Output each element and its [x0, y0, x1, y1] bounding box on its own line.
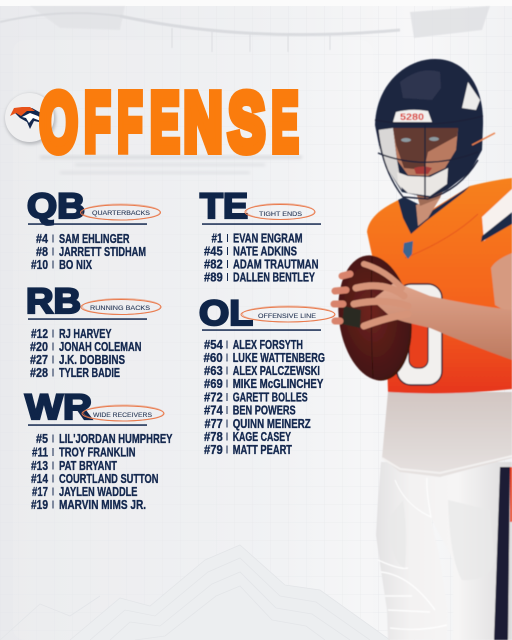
- helmet: [375, 59, 495, 199]
- roster: TE: #82: [204, 256, 223, 272]
- heading: OL: OL: [199, 294, 253, 333]
- roster: WR: MARVIN MIMS JR.: [59, 497, 146, 512]
- roster: RB: J.K. DOBBINS: [59, 352, 125, 367]
- roster: WR: TROY FRANKLIN: [59, 444, 136, 460]
- roster: OL: #74: [204, 403, 223, 418]
- divider: QB: [28, 223, 147, 225]
- roster: RB: #20: [30, 339, 48, 354]
- roster: OL: KAGE CASEY: [233, 429, 291, 444]
- roster: OL: ALEX FORSYTH: [233, 337, 303, 352]
- heading: WR: WR: [25, 388, 92, 427]
- roster: OL: #60: [204, 350, 223, 365]
- divider: RB: [28, 318, 147, 320]
- heading: RB: RB: [26, 282, 81, 321]
- roster: RB: #28: [30, 365, 48, 380]
- divider: TE: [202, 223, 321, 225]
- football: [331, 251, 419, 385]
- roster: TE: NATE ADKINS: [233, 244, 297, 258]
- roster: OL: #79: [204, 442, 223, 457]
- label: wide receivers: WIDE RECEIVERS: [93, 412, 152, 419]
- title: F: [84, 76, 110, 168]
- panel: WR: [25, 388, 173, 512]
- team logo badge: [5, 93, 56, 144]
- roster: TE: #89: [204, 270, 223, 284]
- title: E: [150, 76, 180, 168]
- visor gap: [378, 128, 402, 190]
- label: tight ends: TIGHT ENDS: [259, 211, 302, 218]
- roster: TE: #1: [212, 230, 222, 246]
- divider: OL: [202, 329, 321, 331]
- roster: QB: #10: [31, 257, 48, 272]
- chin guard: [397, 168, 448, 196]
- roster: TE: EVAN ENGRAM: [233, 230, 302, 246]
- roster: WR: [31, 431, 173, 512]
- roster: OL: #63: [204, 363, 223, 378]
- roster: WR: #11: [32, 444, 48, 460]
- helmet plate: 5280: [400, 112, 424, 123]
- roster: OL: QUINN MEINERZ: [233, 416, 311, 431]
- label: offensive line: [241, 306, 335, 322]
- roster: OL: #78: [204, 429, 223, 444]
- roster: WR: #13: [31, 458, 48, 473]
- heading: TE: TE: [200, 187, 248, 226]
- roster: QB: #8: [36, 244, 48, 259]
- mountain contours: [0, 545, 390, 640]
- panel: RB: [26, 282, 161, 380]
- forearm and hand: [334, 264, 512, 360]
- roster: OL: #72: [204, 389, 223, 404]
- pants: [376, 462, 512, 640]
- roster: QB: BO NIX: [59, 257, 92, 272]
- player photo illustration: [331, 59, 512, 640]
- roster: WR: #17: [32, 484, 48, 499]
- lower jersey: [382, 392, 512, 477]
- roster: RB: TYLER BADIE: [59, 365, 120, 380]
- heading: QB: QB: [27, 187, 85, 226]
- roster: TE: ADAM TRAUTMAN: [233, 256, 318, 272]
- roster: RB: RJ HARVEY: [59, 326, 112, 341]
- roster: OL: LUKE WATTENBERG: [233, 350, 325, 365]
- nfl shield: [403, 241, 413, 259]
- panel: QB: [27, 187, 160, 272]
- roster: TE: [204, 230, 318, 284]
- stadium backdrop: [0, 6, 490, 52]
- roster: OL: ALEX PALCZEWSKI: [233, 363, 320, 378]
- roster: RB: #12: [31, 326, 48, 341]
- label: running backs: RUNNING BACKS: [90, 305, 150, 312]
- title shadow: [40, 156, 302, 174]
- shoulder stripe: [482, 189, 512, 241]
- text: E: [272, 76, 298, 168]
- roster: OL: MIKE McGLINCHEY: [233, 376, 324, 391]
- panel: OL: [199, 294, 335, 457]
- title: O: [40, 76, 78, 168]
- roster: TE: DALLEN BENTLEY: [233, 270, 315, 284]
- roster: OL: GARETT BOLLES: [233, 389, 308, 404]
- roster: OL: BEN POWERS: [233, 403, 296, 418]
- roster: RB: #27: [30, 352, 48, 367]
- title: N: [184, 76, 222, 168]
- roster: QB: SAM EHLINGER: [59, 231, 130, 246]
- jersey number: [397, 284, 442, 385]
- roster: OL: #54: [204, 337, 223, 352]
- roster: WR: #14: [31, 471, 49, 486]
- neck: [415, 185, 445, 206]
- upper arm: [491, 253, 512, 315]
- title: F: [118, 76, 142, 168]
- label: quarterbacks: QUARTERBACKS: [92, 210, 150, 217]
- face: [393, 128, 458, 176]
- roster: TE: #45: [204, 244, 223, 258]
- roster: WR: #19: [31, 497, 48, 512]
- title: [40, 76, 298, 168]
- title: S: [228, 76, 265, 168]
- roster: QB: [31, 231, 146, 272]
- football label: [342, 306, 361, 328]
- roster: RB: JONAH COLEMAN: [59, 339, 142, 354]
- divider: WR: [28, 424, 147, 426]
- collar: [398, 186, 470, 234]
- roster: OL: #69: [204, 376, 223, 391]
- roster: OL: #77: [204, 416, 223, 431]
- label: offensive line: OFFENSIVE LINE: [258, 313, 316, 320]
- roster: OL: MATT PEART: [233, 442, 292, 457]
- roster: QB: #4: [36, 231, 49, 246]
- roster: OL: [204, 337, 325, 457]
- roster: WR: LIL'JORDAN HUMPHREY: [59, 431, 173, 446]
- panel: TE: [200, 187, 321, 284]
- roster: WR: PAT BRYANT: [59, 458, 117, 473]
- orange jersey: [367, 178, 512, 393]
- facemask: [375, 116, 483, 199]
- roster: QB: JARRETT STIDHAM: [59, 244, 146, 259]
- roster: WR: COURTLAND SUTTON: [59, 471, 158, 486]
- icon: bronco horse head: [10, 107, 48, 129]
- label: wide receivers: [82, 405, 164, 421]
- roster: WR: JAYLEN WADDLE: [59, 484, 138, 499]
- pants stripe: [494, 467, 510, 640]
- roster: WR: #5: [36, 431, 48, 446]
- roster: RB: [30, 326, 142, 380]
